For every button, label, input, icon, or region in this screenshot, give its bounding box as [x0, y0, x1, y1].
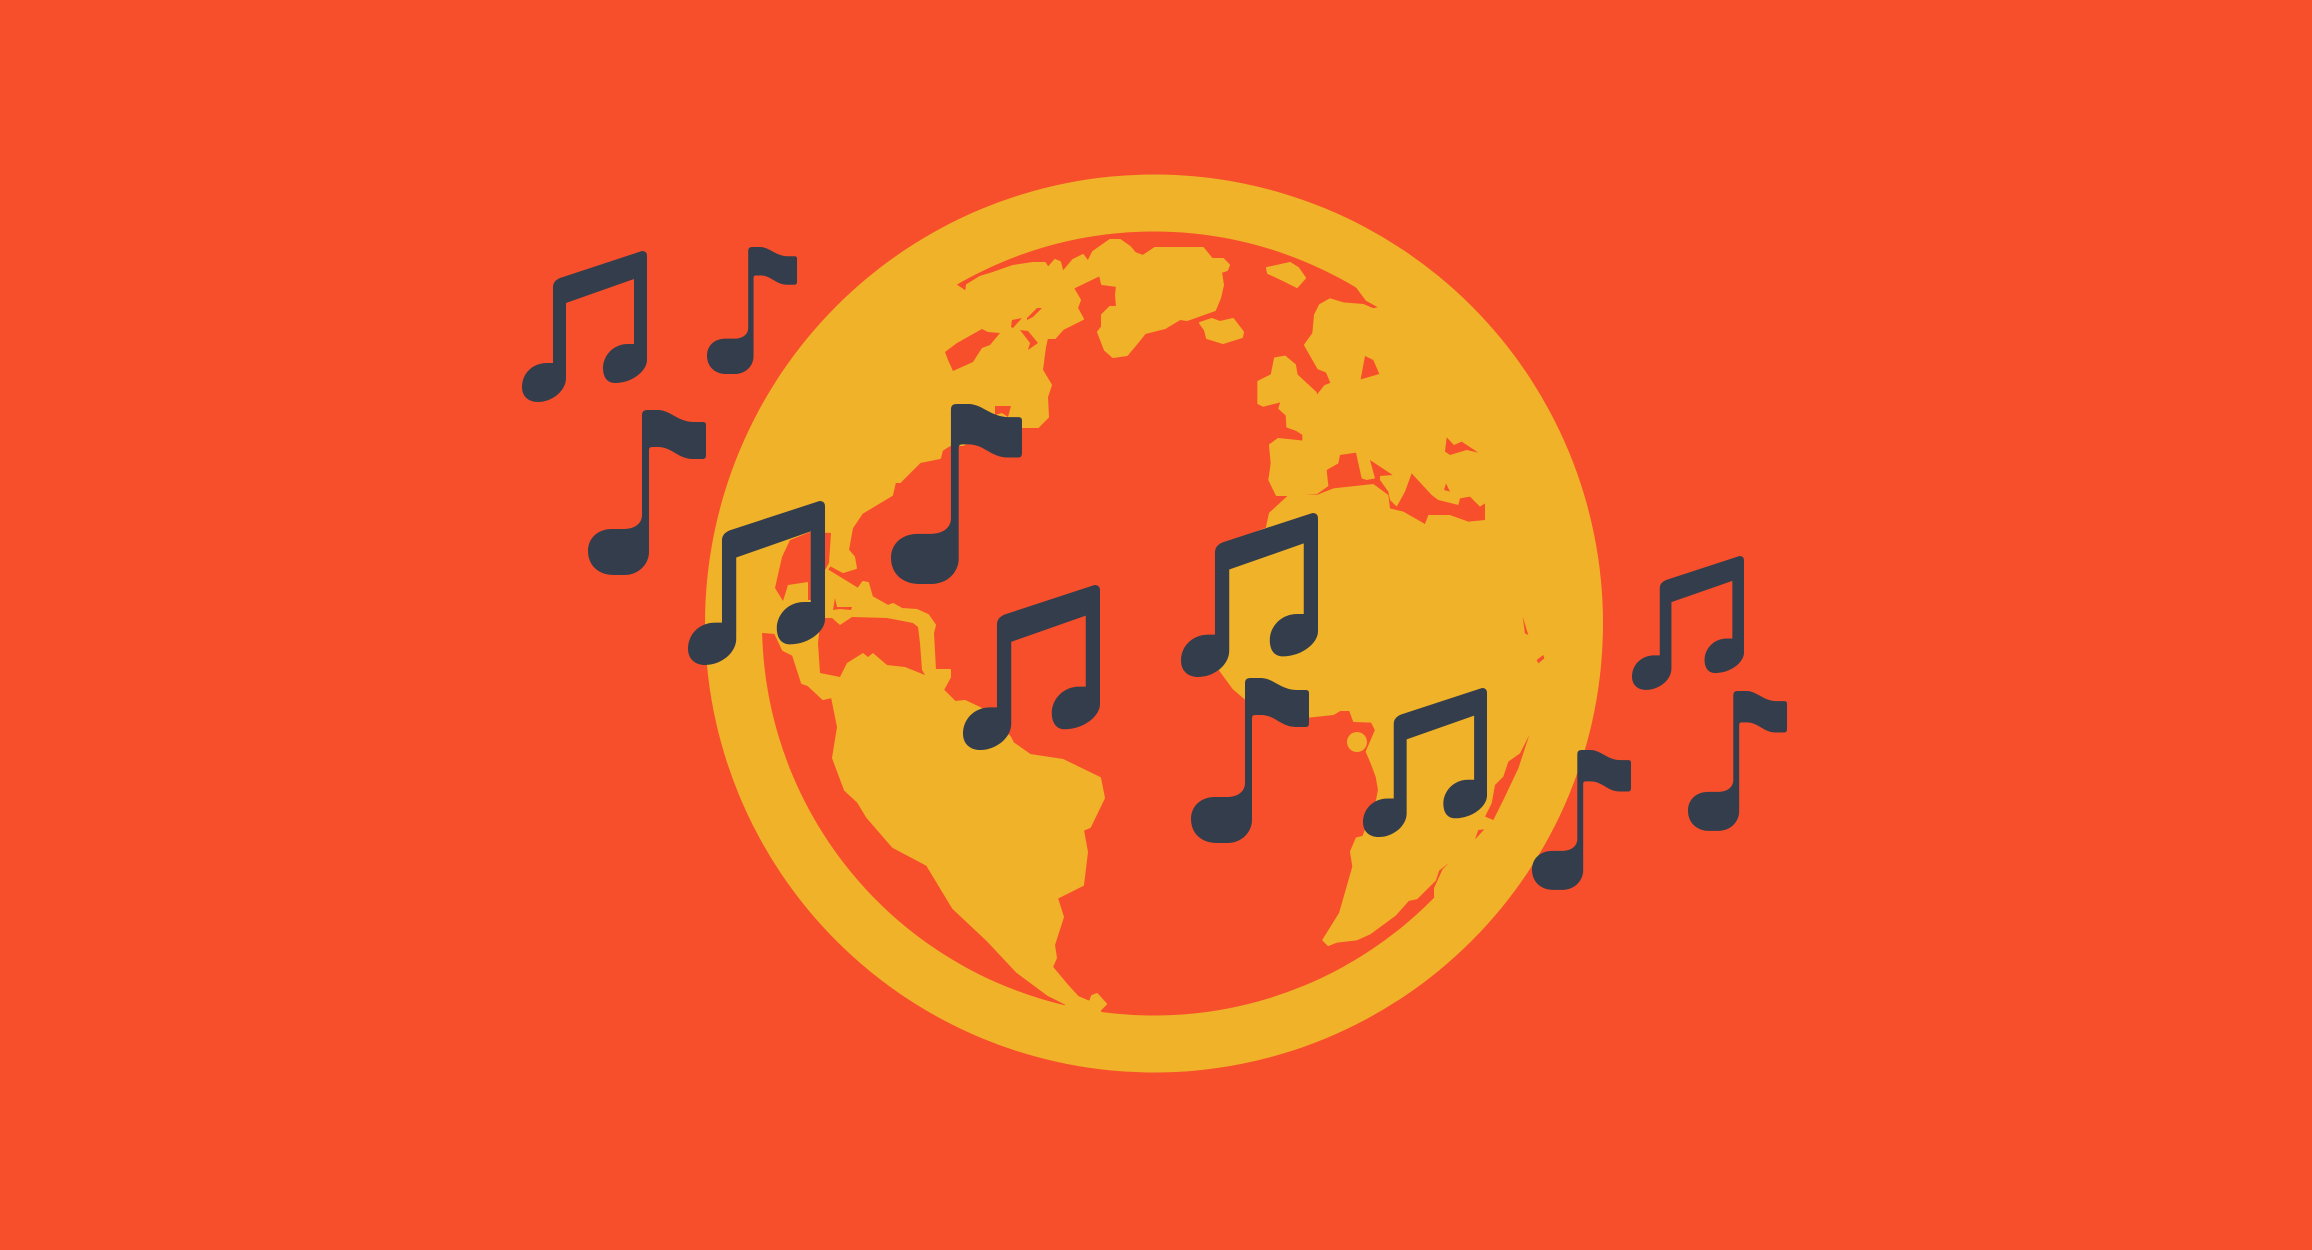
icon: single note lower centre	[1191, 678, 1309, 843]
icon: single note far right	[1688, 691, 1787, 831]
globe ocean	[762, 232, 1546, 1016]
globe ring	[705, 174, 1603, 1072]
icon: beamed note centre right	[1181, 513, 1318, 677]
sea: Black Sea	[1445, 437, 1478, 455]
sea: Cuba channel	[833, 598, 852, 610]
sea: arctic straits	[1011, 308, 1042, 350]
icon: beamed note left	[688, 501, 825, 665]
land: Europe, Africa and Asia	[1220, 270, 1570, 945]
sea: small inlet	[1444, 483, 1450, 492]
icon: single note top	[707, 247, 797, 374]
sea: St Lawrence notch	[995, 406, 1011, 417]
sea: White Sea	[1361, 356, 1379, 379]
sea: small strait	[1475, 829, 1484, 839]
seas and bays	[775, 308, 1544, 839]
sea: gulf behind note	[775, 532, 831, 601]
continents	[745, 240, 1570, 1030]
icon: single note upper centre	[891, 404, 1022, 584]
icon: beamed note centre	[963, 585, 1100, 750]
icon: beamed note far right	[1632, 556, 1744, 690]
land: small Atlantic island	[1347, 732, 1367, 752]
sea: Mediterranean	[1306, 453, 1485, 524]
sea: Indian Ocean sliver	[1485, 735, 1529, 820]
sea: Caribbean	[818, 617, 925, 677]
icon: single note left	[588, 410, 706, 575]
music notes	[522, 247, 1787, 890]
icon: single note on ring edge	[1532, 750, 1631, 890]
icon: beamed note lower right	[1363, 688, 1487, 837]
land: Iceland	[1200, 319, 1243, 343]
land: northern island	[1267, 263, 1305, 287]
icon: beamed note top left	[522, 251, 647, 402]
land: the Americas and Greenland	[745, 240, 1229, 1030]
globe	[705, 174, 1603, 1072]
sea: small gulf	[1523, 617, 1528, 635]
sea: small channel	[1537, 655, 1544, 663]
sea: Hudson Bay	[945, 329, 1000, 371]
illustration: globe with music notes	[522, 174, 1787, 1072]
